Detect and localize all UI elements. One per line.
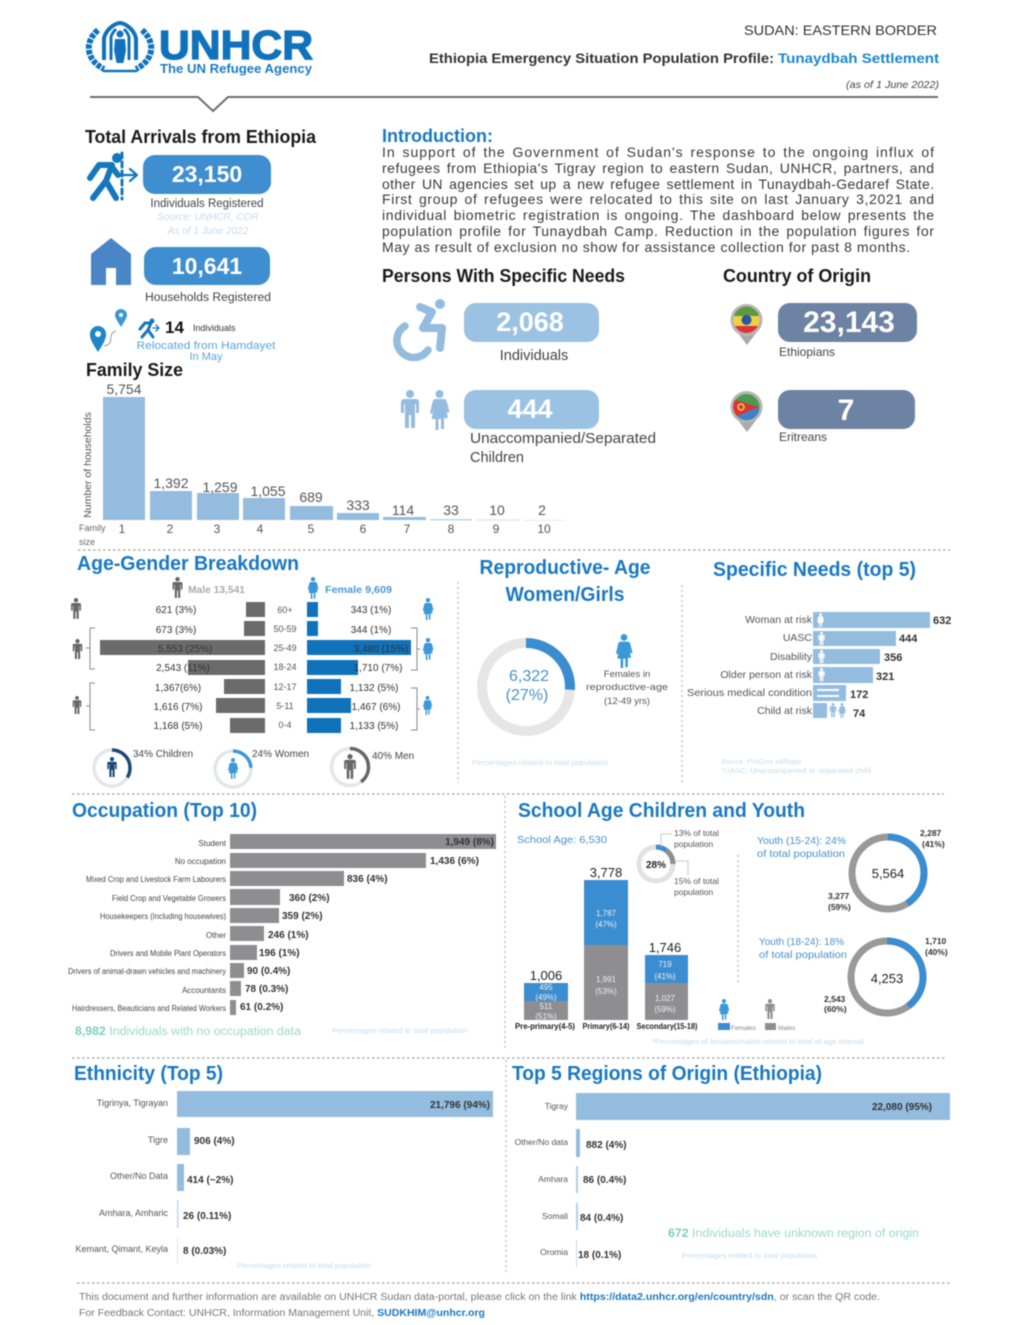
body text <box>382 144 934 255</box>
age labels: 18-24 <box>273 662 297 672</box>
male values: 2,543 (11%) <box>156 663 210 674</box>
donut: youth 15-24: (41%) <box>922 839 945 849</box>
panel: school age children and youth <box>515 800 948 1046</box>
caption: reproductive-age <box>586 682 668 693</box>
households label: Households Registered <box>145 292 271 304</box>
values: 1,055 <box>250 483 286 499</box>
logo tagline: The UN Refugee Agency <box>160 61 313 76</box>
axis labels: 2 <box>167 522 174 536</box>
values <box>578 1102 932 1261</box>
axis labels <box>119 522 551 536</box>
values: 22,080 (95%) <box>872 1102 932 1113</box>
panel: total arrivals: Individuals <box>193 323 236 333</box>
axis caption: size <box>79 537 95 547</box>
axis labels: 10 <box>537 522 551 536</box>
values: 360 (2%) <box>289 893 330 904</box>
age labels <box>273 605 297 730</box>
panel: total arrivals <box>85 127 317 363</box>
caption: Females in <box>604 669 650 680</box>
axis labels: 7 <box>404 522 411 536</box>
donut: school age share: 28% <box>646 860 666 871</box>
category labels: Other <box>206 931 226 940</box>
age labels: 50-59 <box>273 624 297 634</box>
legend: male: Male 13,541 <box>188 585 245 596</box>
donut: youth 18-24 <box>824 936 948 1014</box>
youth 18-24 text <box>759 936 847 961</box>
donut: youth 15-24 <box>828 828 945 912</box>
donut: youth 15-24: (59%) <box>828 902 851 912</box>
bar segment labels <box>535 909 676 1021</box>
values: 114 <box>392 502 414 518</box>
heading: Age-Gender Breakdown <box>77 553 299 575</box>
bar totals <box>530 865 681 983</box>
legend <box>718 999 796 1032</box>
donut: youth 18-24: 1,710 <box>925 936 947 946</box>
legend: male <box>173 577 245 598</box>
values: 1,259 <box>202 479 238 495</box>
icon: Ethiopia flag pin <box>730 304 762 345</box>
relocated note: Relocated from Hamdayet <box>136 340 276 352</box>
bar segment labels: (53%) <box>595 987 617 996</box>
bar segment labels: (49%) <box>535 993 557 1002</box>
category labels: Child at risk <box>757 705 813 717</box>
as-of date: As of 1 June 2022 <box>167 226 249 237</box>
values: 2 <box>538 502 546 518</box>
category labels: Amhara, Amharic <box>99 1208 168 1218</box>
values: 18 (0.1%) <box>578 1250 621 1261</box>
bars <box>177 1091 493 1264</box>
female values: 343 (1%) <box>351 605 391 616</box>
header: report title <box>429 22 939 91</box>
values: 8 (0.03%) <box>183 1246 226 1257</box>
values: 836 (4%) <box>347 874 388 885</box>
values: 5,754 <box>106 381 142 397</box>
icon: pregnant woman <box>616 634 632 668</box>
UASC label: Children <box>470 450 524 466</box>
note: unknown region: 672 Individuals have unknown region of origin <box>668 1228 919 1240</box>
male bars <box>100 602 265 733</box>
icon: wheelchair <box>397 299 445 357</box>
country label: SUDAN: EASTERN BORDER <box>744 22 937 38</box>
category labels: Hairdressers, Beauticians and Related Workers <box>72 1004 226 1013</box>
female values: 344 (1%) <box>351 625 391 636</box>
values: 906 (4%) <box>194 1136 235 1147</box>
legend: Females <box>731 1025 757 1032</box>
bar axis labels: Pre-primary(4-5) <box>515 1022 575 1031</box>
label: Individuals Registered <box>150 198 264 210</box>
bar icons <box>817 613 839 697</box>
body text: population profile for Tunaydbah Camp. Reduction in the population figures for <box>382 223 934 239</box>
legend: female <box>308 577 392 599</box>
panel: persons with specific needs <box>382 266 656 466</box>
icon: small runner <box>140 318 159 337</box>
category labels: Accountants <box>182 986 226 995</box>
youth 15-24 text <box>757 835 846 860</box>
male values: 621 (3%) <box>156 605 196 616</box>
donut: youth 18-24: 4,253 <box>871 971 903 986</box>
stat: households <box>144 247 270 285</box>
heading: Women/Girls <box>506 584 624 606</box>
values: 33 <box>443 502 459 518</box>
youth 18-24 text: Youth (18-24): 18% <box>759 936 844 948</box>
category labels: Tigrinya, Tigrayan <box>97 1098 168 1108</box>
stat: individuals <box>464 303 599 342</box>
note: percentages: Percentages related to total population <box>682 1253 817 1260</box>
UASC label: Unaccompanied/Separated <box>470 431 656 447</box>
category labels: Student <box>198 839 227 848</box>
values: 84 (0.4%) <box>580 1213 623 1224</box>
values: 632 <box>933 615 951 627</box>
callout: male share: 15% of total <box>674 876 719 886</box>
heading: Total Arrivals from Ethiopia <box>85 127 317 147</box>
values: 882 (4%) <box>586 1140 627 1151</box>
body text: other UN agencies set up a new refugee settlement in Tunaydbah-Gedaref State. <box>382 176 934 192</box>
bars <box>230 834 496 1015</box>
icon: child at risk <box>830 703 846 718</box>
panel: total arrivals: In May <box>189 351 223 363</box>
panel: age-gender breakdown <box>71 553 434 787</box>
legend: Males <box>778 1025 796 1032</box>
values: 359 (2%) <box>282 911 323 922</box>
youth 18-24 text: of total population <box>759 949 847 961</box>
category labels: Kemant, Qimant, Keyla <box>75 1244 168 1254</box>
values: 26 (0.11%) <box>183 1211 231 1222</box>
bar axis labels <box>515 1022 698 1031</box>
donut: women <box>215 749 309 787</box>
heading: Country of Origin <box>723 266 871 286</box>
bar segment labels: 1,787 <box>596 909 617 918</box>
heading: Family Size <box>86 360 183 380</box>
values: 10 <box>489 502 505 518</box>
category labels: UASC <box>783 632 812 644</box>
donut: youth 18-24: (60%) <box>824 1004 847 1014</box>
bars <box>103 397 566 521</box>
male values: 673 (3%) <box>156 625 196 636</box>
male values: 1,616 (7%) <box>154 702 202 713</box>
bar segment labels: 1,991 <box>596 975 617 984</box>
age labels: 60+ <box>277 605 293 615</box>
icon: children <box>401 390 450 430</box>
logo wordmark: UNHCR <box>159 22 313 68</box>
values: 61 (0.2%) <box>240 1002 283 1013</box>
source: *UASC: Unaccompanied or separated child <box>721 768 871 775</box>
category labels: Tigray <box>545 1101 569 1111</box>
category labels: Drivers and Mobile Plant Operators <box>110 949 226 958</box>
category labels: Housekeepers (Including housewives) <box>100 912 226 921</box>
values: 689 <box>299 489 323 505</box>
panel: total arrivals: 10,641 <box>172 253 242 279</box>
age labels: 12-17 <box>273 682 297 692</box>
values: 333 <box>346 497 370 513</box>
icon: UNHCR emblem <box>89 23 151 71</box>
stacked bars <box>524 880 688 1020</box>
axis labels: 4 <box>257 522 264 536</box>
category labels: Oromia <box>540 1247 568 1257</box>
category labels <box>687 614 813 717</box>
category labels: Drivers of animal-drawn vehicles and machinery <box>68 967 226 976</box>
chart: family size <box>79 360 566 547</box>
category labels: Older person at risk <box>720 669 813 681</box>
bar axis labels: Secondary(15-18) <box>636 1022 698 1031</box>
UASC label <box>470 431 656 466</box>
heading: Ethnicity (Top 5) <box>74 1063 223 1085</box>
data portal line: This document and further information are available on UNHCR Sudan data-portal, please click on the link https://data2.unhcr.org/en/country/sdn , or scan the QR code. <box>79 1292 880 1303</box>
heading: Reproductive- Age <box>480 557 650 579</box>
chart: occupation top 10 <box>68 800 496 1038</box>
category labels: Disability <box>770 651 813 663</box>
age labels: 0-4 <box>278 720 292 730</box>
axis title: Number of households <box>82 412 94 518</box>
values: 321 <box>876 671 894 683</box>
donut: youth 18-24: (40%) <box>925 947 948 957</box>
values: 196 (1%) <box>259 948 300 959</box>
values: 356 <box>884 652 902 664</box>
axis caption: Family <box>79 523 106 533</box>
bar segment labels: (47%) <box>595 920 617 929</box>
values: 1,949 (8%) <box>445 837 494 848</box>
logo: UNHCR <box>89 22 313 76</box>
school age total: School Age: 6,530 <box>517 834 607 846</box>
body text: individual biometric registration is ongoing. The dashboard below presents the <box>382 207 934 223</box>
female values: 1,467 (6%) <box>352 702 400 713</box>
female bars <box>307 602 411 733</box>
bar segment labels: 511 <box>540 1002 553 1011</box>
category labels <box>68 839 227 1013</box>
body text: First group of refugees were relocated to this site on last January 3,2021 and <box>382 191 934 207</box>
values <box>106 381 546 518</box>
youth 15-24 text: Youth (15-24): 24% <box>757 835 846 847</box>
bar segment labels: 719 <box>658 960 672 969</box>
note: Percentages related to total population <box>237 1263 371 1270</box>
stat: individuals registered <box>143 155 271 194</box>
bar totals: 1,006 <box>530 968 562 983</box>
body text: In support of the Government of Sudan's response to the ongoing influx of <box>382 144 934 160</box>
heading: School Age Children and Youth <box>518 800 805 822</box>
category labels <box>75 1098 168 1254</box>
callout: female share: 13% of total <box>674 828 719 838</box>
axis labels: 5 <box>308 522 315 536</box>
callout: female share: population <box>674 839 714 849</box>
category labels: Tigre <box>148 1135 168 1145</box>
values: 172 <box>850 689 868 701</box>
footer <box>79 1292 880 1319</box>
bar segment labels: (59%) <box>654 1005 676 1014</box>
icon: house <box>91 238 131 285</box>
donut: youth 18-24: 2,543 <box>824 994 846 1004</box>
male values: 5,553 (25%) <box>158 644 212 655</box>
values: 1,436 (6%) <box>430 856 479 867</box>
axis labels: 6 <box>360 522 367 536</box>
values: 1,392 <box>153 475 189 491</box>
panel: introduction <box>382 126 934 255</box>
female values: 1,132 (5%) <box>350 683 398 694</box>
caption: (12-49 yrs) <box>604 696 650 707</box>
title: Ethiopia Emergency Situation Population Profile: <box>429 50 774 66</box>
callout: male share <box>674 876 719 897</box>
stat: Eritreans <box>778 390 915 429</box>
panel: country of origin <box>723 266 917 444</box>
bar totals: 1,746 <box>649 940 681 955</box>
stat: relocated: 14 <box>165 318 184 337</box>
panel: persons with specific needs: 444 <box>507 394 553 424</box>
bar segment labels: (51%) <box>535 1012 557 1021</box>
category labels: Other/No data <box>515 1137 568 1147</box>
heading: Occupation (Top 10) <box>72 800 257 822</box>
note: no occupation data: 8,982 Individuals with no occupation data <box>75 1026 302 1038</box>
bar axis labels: Primary(6-14) <box>582 1022 630 1031</box>
heading: Introduction: <box>382 126 493 146</box>
icons: age groups female <box>423 598 434 715</box>
settlement name: Tunaydbah Settlement <box>778 50 939 66</box>
axis caption <box>79 523 106 547</box>
donut: men <box>332 748 414 786</box>
note: Percentages related to total population <box>472 760 608 767</box>
female values: 1,133 (5%) <box>350 721 398 732</box>
values <box>183 1100 490 1257</box>
axis labels: 9 <box>493 522 500 536</box>
donut: women: 24% Women <box>252 749 309 760</box>
axis labels: 1 <box>119 522 126 536</box>
donut: men: 40% Men <box>372 751 414 762</box>
female values: 1,710 (7%) <box>354 663 402 674</box>
caption <box>586 669 668 707</box>
axis labels: 3 <box>214 522 221 536</box>
brackets <box>86 628 420 730</box>
callout: male share: population <box>674 887 714 897</box>
male values: 1,367(6%) <box>155 683 201 694</box>
bars <box>813 612 930 718</box>
stat: UASC <box>464 390 599 429</box>
chart: top 5 regions of origin <box>512 1063 950 1267</box>
bar totals: 3,778 <box>590 865 622 880</box>
category labels <box>515 1101 569 1257</box>
values <box>850 615 951 720</box>
panel: specific needs top 5 <box>687 559 951 775</box>
panel: total arrivals: 23,150 <box>172 161 242 187</box>
values: 90 (0.4%) <box>247 966 290 977</box>
icons: age groups male <box>71 598 82 714</box>
values: 246 (1%) <box>268 930 309 941</box>
source: Source: UNHCR, COR <box>157 212 259 223</box>
stat: Ethiopians <box>778 303 917 342</box>
category labels: Serious medical condition <box>687 687 812 699</box>
callout: female share <box>674 828 719 849</box>
bars <box>576 1093 950 1267</box>
values: 78 (0.3%) <box>245 984 288 995</box>
note: *Percentages of females/males related to total of age interval <box>652 1039 864 1046</box>
category labels: Amhara <box>538 1174 568 1184</box>
panel: persons with specific needs: 2,068 <box>496 307 564 337</box>
panel: country of origin: 23,143 <box>803 306 895 339</box>
icon: relocation route <box>90 309 127 352</box>
donut: children: 34% Children <box>133 749 193 760</box>
bar segment labels: 495 <box>539 983 553 992</box>
donut: youth 15-24: 2,287 <box>920 828 942 838</box>
bar segment labels: 1,027 <box>655 994 676 1003</box>
values: 444 <box>899 633 918 645</box>
category labels: Somali <box>542 1211 568 1221</box>
panel: country of origin: 7 <box>838 394 854 427</box>
heading: Specific Needs (top 5) <box>713 559 916 581</box>
donut: children <box>94 749 193 786</box>
source <box>721 759 871 775</box>
date: (as of 1 June 2022) <box>846 80 939 91</box>
donut <box>482 643 570 731</box>
values: 21,796 (94%) <box>430 1100 490 1111</box>
label: Ethiopians <box>779 345 835 359</box>
female values: 3,480 (15%) <box>354 644 408 655</box>
label: Individuals <box>500 348 568 364</box>
axis labels: 8 <box>448 522 455 536</box>
donut: school age share <box>639 834 688 881</box>
chart: ethnicity top 5 <box>74 1063 493 1270</box>
age labels: 5-11 <box>276 701 294 711</box>
heading <box>480 557 650 606</box>
donut: youth 15-24: 3,277 <box>828 891 850 901</box>
age labels: 25-49 <box>273 643 297 653</box>
donut: youth 15-24: 5,564 <box>872 866 904 881</box>
body text: May as result of exclusion no show for assistance collection for past 8 months. <box>382 239 910 255</box>
female values <box>350 605 408 732</box>
category labels: No occupation <box>175 857 226 866</box>
icon: person crossing border <box>90 153 137 199</box>
heading: Persons With Specific Needs <box>382 266 625 286</box>
values <box>240 837 494 1013</box>
male values <box>154 605 212 732</box>
values: 414 (~2%) <box>187 1175 233 1186</box>
values: 86 (0.4%) <box>583 1175 626 1186</box>
note: percentages: Percentages related to total population <box>332 1028 467 1035</box>
bar segment labels: (41%) <box>654 972 676 981</box>
category labels: Mixed Crop and Livestock Farm Labourers <box>86 875 226 884</box>
male values: 1,168 (5%) <box>154 721 202 732</box>
donut: (27%) <box>506 687 548 704</box>
category labels: Other/No Data <box>110 1171 168 1181</box>
body text: refugees from Ethiopia's Tigray region to eastern Sudan, UNHCR, partners, and <box>382 160 934 176</box>
heading: Top 5 Regions of Origin (Ethiopia) <box>512 1063 822 1085</box>
category labels: Field Crop and Vegetable Growers <box>112 894 226 903</box>
donut: 6,322 <box>509 668 549 685</box>
values: 74 <box>853 708 866 720</box>
category labels: Woman at risk <box>745 614 813 626</box>
feedback line: For Feedback Contact: UNHCR, Information Management Unit, SUDKHIM@unhcr.org <box>79 1308 485 1319</box>
panel: reproductive-age women <box>472 557 668 767</box>
legend: female: Female 9,609 <box>325 585 392 596</box>
Eritreans label: Eritreans <box>779 430 827 444</box>
youth 15-24 text: of total population <box>757 848 845 860</box>
icon: Eritrea flag pin <box>730 391 762 432</box>
source: Source: ProGres v4/Rapp <box>721 759 801 766</box>
